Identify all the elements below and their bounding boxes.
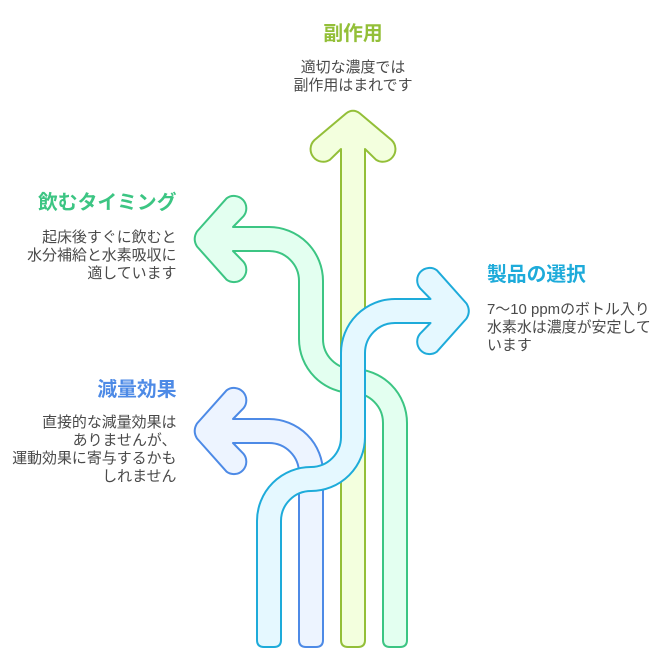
body: drinking timing xyxy=(27,229,176,282)
body: drinking timing: 適しています xyxy=(87,265,176,282)
body: product selection: 7〜10 ppmのボトル入り xyxy=(487,301,650,318)
heading: weight loss effect: 減量効果 xyxy=(97,379,176,401)
body: product selection xyxy=(487,301,651,354)
body: side effects: 適切な濃度では xyxy=(301,59,405,76)
heading: product selection: 製品の選択 xyxy=(487,264,586,286)
text block: drinking timing xyxy=(27,192,176,282)
body: product selection: います xyxy=(487,337,532,354)
body: side effects: 副作用はまれです xyxy=(293,77,413,94)
body: drinking timing: 起床後すぐに飲むと xyxy=(42,229,176,246)
body: weight loss effect xyxy=(12,414,176,485)
body: weight loss effect: ありませんが、 xyxy=(73,432,176,449)
arrow: product selection (right) xyxy=(257,268,469,647)
body: product selection: 水素水は濃度が安定して xyxy=(487,319,651,336)
heading: side effects: 副作用 xyxy=(323,23,383,45)
body: weight loss effect: 運動効果に寄与するかも xyxy=(12,450,176,467)
arrow: weight loss effect (left) xyxy=(195,388,323,647)
body: weight loss effect: 直接的な減量効果は xyxy=(42,414,176,431)
text block: weight loss effect xyxy=(12,378,176,485)
arrow: drinking timing (left) xyxy=(195,196,407,647)
body: weight loss effect: しれません xyxy=(102,468,176,485)
text block: side effects xyxy=(293,23,413,94)
body: side effects xyxy=(293,59,413,94)
arrow: side effects (up) xyxy=(311,111,395,647)
heading: drinking timing: 飲むタイミング xyxy=(38,192,176,214)
body: drinking timing: 水分補給と水素吸収に xyxy=(27,247,176,264)
text block: product selection xyxy=(487,264,651,354)
